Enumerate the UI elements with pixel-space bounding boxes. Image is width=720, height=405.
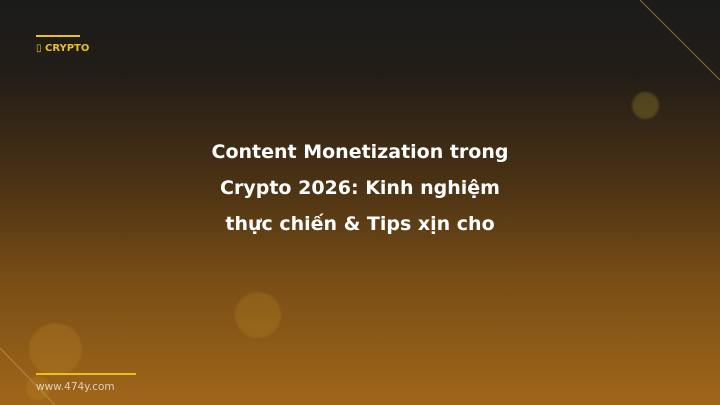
bottom accent bar	[36, 373, 136, 375]
title	[212, 141, 508, 235]
title: Content Monetization trong	[212, 141, 508, 163]
website: www.474y.com	[36, 381, 115, 393]
bokeh circles	[632, 92, 659, 119]
title: Crypto 2026: Kinh nghiệm	[220, 177, 500, 199]
title: thực chiến & Tips xịn cho	[225, 213, 495, 235]
top accent bar	[36, 35, 80, 37]
category label: ▯ CRYPTO	[36, 43, 89, 54]
